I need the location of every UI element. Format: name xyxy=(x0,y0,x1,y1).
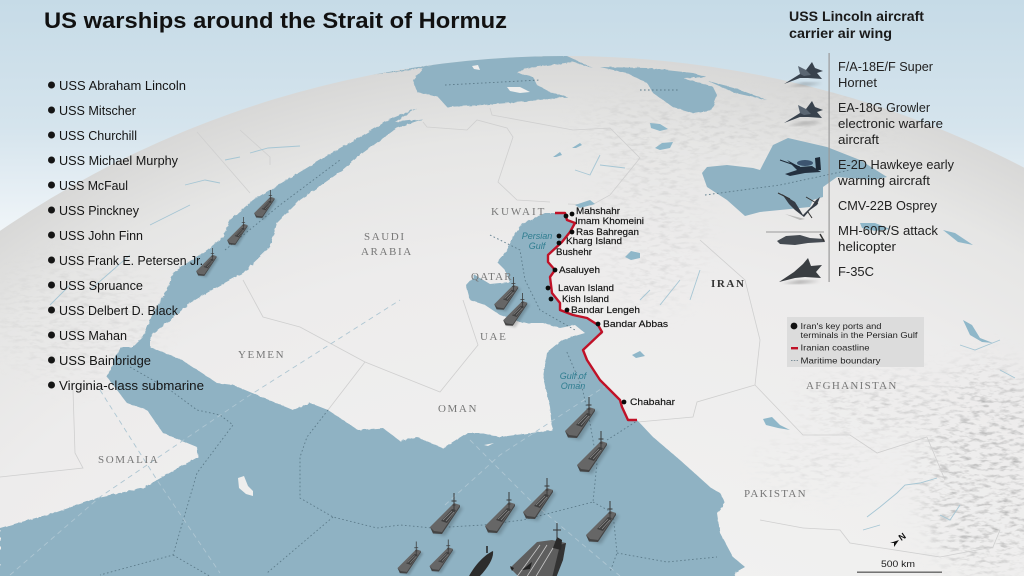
list of warships: Virginia-class submarine xyxy=(59,379,204,393)
legend: Maritime boundary xyxy=(800,356,881,366)
aircraft carrier xyxy=(510,523,566,576)
port labels xyxy=(556,206,675,407)
sea labels: Gulf of xyxy=(560,371,588,381)
port labels: Kharg Island xyxy=(566,236,622,246)
country labels: KUWAIT xyxy=(491,206,546,218)
port labels: Ras Bahregan xyxy=(576,227,639,237)
terrain shading xyxy=(15,110,1024,576)
air wing divider xyxy=(828,53,830,282)
air wing text: MH-60R/S attack xyxy=(838,224,939,238)
port labels: Lavan Island xyxy=(558,283,614,293)
list of warships: USS Churchill xyxy=(59,129,137,143)
icon: E-2D Hawkeye xyxy=(780,157,821,176)
country labels: UAE xyxy=(480,331,507,343)
maritime boundaries xyxy=(100,80,850,576)
country labels: YEMEN xyxy=(238,349,285,361)
air wing text: Hornet xyxy=(838,76,878,90)
scale bar xyxy=(857,559,942,573)
list of warships: USS Delbert D. Black xyxy=(59,304,179,318)
legend: Iran's key ports and xyxy=(800,321,882,331)
rivers and lakes xyxy=(553,123,993,430)
country labels: SOMALIA xyxy=(98,454,159,466)
sea labels: Gulf xyxy=(529,241,547,251)
country labels: ARABIA xyxy=(361,246,413,258)
port labels: Bandar Abbas xyxy=(603,319,669,329)
sea labels: Persian xyxy=(522,231,552,241)
icon: MH-60 helicopter xyxy=(766,232,825,245)
legend: Iranian coastline xyxy=(800,342,870,352)
sea: Caspian xyxy=(702,138,887,216)
icon: F/A-18E/F xyxy=(784,62,823,87)
list of warships xyxy=(48,79,204,393)
list of warships: USS Spruance xyxy=(59,279,143,293)
legend: terminals in the Persian Gulf xyxy=(800,330,918,340)
country labels: AFGHANISTAN xyxy=(806,380,898,392)
icon: F-35C xyxy=(779,258,822,284)
legend xyxy=(787,317,924,367)
graticule lines xyxy=(10,300,620,576)
title: US warships around the Strait of Hormuz xyxy=(44,8,507,33)
list of warships: USS John Finn xyxy=(59,229,143,243)
port dots xyxy=(546,212,626,404)
air wing text: EA-18G Growler xyxy=(838,101,930,115)
list of warships: USS Mahan xyxy=(59,329,127,343)
list of warships: USS Frank E. Petersen Jr. xyxy=(59,254,203,268)
air wing text: E-2D Hawkeye early xyxy=(838,158,955,172)
air wing text: F-35C xyxy=(838,265,874,279)
country labels: PAKISTAN xyxy=(744,488,807,500)
port labels: Asaluyeh xyxy=(559,265,600,275)
north arrow: N xyxy=(897,531,908,543)
air wing heading: USS Lincoln aircraft xyxy=(789,9,925,24)
icon: EA-18G xyxy=(784,101,823,126)
country labels: IRAN xyxy=(711,278,746,290)
Iranian coastline xyxy=(548,213,637,420)
port labels: Bushehr xyxy=(556,247,592,257)
list of warships: USS Mitscher xyxy=(59,104,136,118)
air wing heading: carrier air wing xyxy=(789,26,892,41)
list of warships: USS Bainbridge xyxy=(59,354,151,368)
port labels: Kish Island xyxy=(562,294,609,304)
air wing text: warning aircraft xyxy=(837,174,931,188)
submarine xyxy=(468,546,493,576)
icon: CMV-22B Osprey xyxy=(778,193,820,220)
port labels: Mahshahr xyxy=(576,206,620,216)
air wing text: F/A-18E/F Super xyxy=(838,60,933,74)
country labels: OMAN xyxy=(438,403,478,415)
port labels: Imam Khomeini xyxy=(575,216,644,226)
list of warships: USS Abraham Lincoln xyxy=(59,79,186,93)
sea labels xyxy=(522,231,588,391)
country labels xyxy=(98,206,898,500)
port labels: Bandar Lengeh xyxy=(571,305,640,315)
list of warships: USS Michael Murphy xyxy=(59,154,179,168)
country labels: QATAR xyxy=(471,271,513,283)
islands xyxy=(238,65,530,496)
sea labels: Oman xyxy=(561,381,585,391)
seas xyxy=(0,56,767,576)
air wing text: helicopter xyxy=(838,240,896,254)
port labels: Chabahar xyxy=(630,397,675,407)
air wing text: aircraft xyxy=(838,133,880,147)
north arrow xyxy=(890,531,908,547)
scale bar: 500 km xyxy=(881,559,915,570)
sea: Mediterranean xyxy=(372,56,593,107)
sea: Black Sea xyxy=(600,67,767,113)
air wing text: CMV-22B Osprey xyxy=(838,199,938,213)
country labels: SAUDI xyxy=(364,231,406,243)
list of warships: USS Pinckney xyxy=(59,204,140,218)
air wing text xyxy=(837,60,955,279)
air wing text: electronic warfare xyxy=(838,117,943,131)
list of warships: USS McFaul xyxy=(59,179,128,193)
country borders xyxy=(0,108,1000,557)
warships xyxy=(196,190,619,575)
sea: Arabian Sea, Red Sea, Persian Gulf xyxy=(0,108,745,576)
air wing heading xyxy=(789,9,925,41)
